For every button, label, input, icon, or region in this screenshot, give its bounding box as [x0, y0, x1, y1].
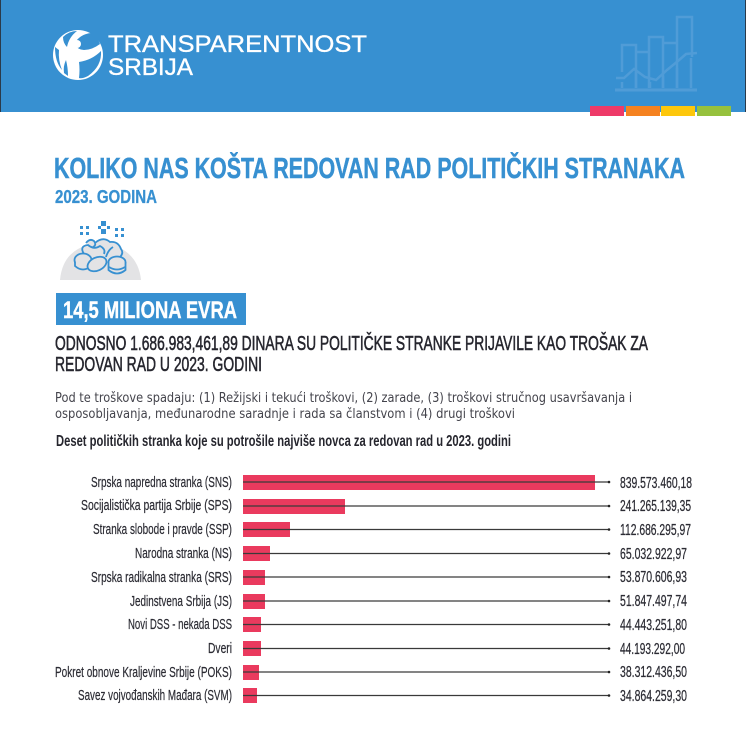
chart heading: Deset političkih stranka koje su potrošile najviše novca za redovan rad u 2023. godini	[56, 433, 511, 450]
row: POKS: 38.312.436,50	[620, 664, 687, 681]
logo: Transparentnost Srbija	[53, 30, 367, 81]
icon: pile of coins	[60, 221, 141, 280]
logo wordmark: TRANSPARENTNOST	[108, 31, 367, 58]
callout: 14,5 miliona evra: 14,5 MILIONA EVRA	[63, 297, 237, 324]
lead statement	[55, 332, 648, 376]
row: Novi DSS: Novi DSS - nekada DSS	[128, 616, 232, 633]
row: SNS: 839.573.460,18	[620, 475, 692, 492]
row: SRS: 53.870.606,93	[620, 569, 687, 586]
row: JS	[130, 593, 687, 610]
row: POKS: Pokret obnove Kraljevine Srbije (POKS)	[55, 664, 232, 681]
row: Novi DSS: 44.443.251,80	[620, 617, 687, 634]
row: POKS	[55, 664, 687, 681]
row: SPS	[81, 497, 691, 515]
row: SSP: 112.686.295,97	[620, 522, 691, 539]
callout: 14,5 miliona evra	[56, 293, 246, 325]
icon: globe with figure	[53, 30, 103, 80]
row: SPS: Socijalistička partija Srbije (SPS)	[81, 497, 232, 514]
row: SSP: Stranka slobode i pravde (SSP)	[93, 521, 232, 538]
row: SRS	[91, 569, 687, 586]
row: SVM: Savez vojvođanskih Mađara (SVM)	[78, 687, 232, 704]
lead statement: REDOVAN RAD U 2023. GODINI	[55, 354, 262, 376]
row: SNS: Srpska napredna stranka (SNS)	[91, 474, 232, 491]
colour strip	[590, 106, 731, 116]
row: NS: 65.032.922,97	[620, 546, 687, 563]
row: Dveri: Dveri	[208, 640, 232, 657]
bar chart: top ten parties	[55, 474, 692, 705]
row: Dveri: 44.193.292,00	[620, 641, 685, 658]
description text	[55, 391, 632, 422]
row: JS: 51.847.497,74	[620, 593, 687, 610]
row: SNS	[91, 474, 692, 492]
logo wordmark	[108, 31, 367, 81]
subtitle: 2023. GODINA	[55, 187, 157, 207]
row: SVM	[78, 687, 687, 705]
row: SPS: 241.265.139,35	[620, 498, 691, 515]
icon: faint bar and line chart	[615, 17, 697, 90]
row: Dveri	[208, 640, 685, 658]
description text: osposobljavanja, međunarodne saradnje i rada sa članstvom i (4) drugi troškovi	[55, 407, 515, 422]
row: NS: Narodna stranka (NS)	[135, 545, 232, 562]
row: SSP	[93, 521, 691, 539]
row: JS: Jedinstvena Srbija (JS)	[130, 593, 232, 610]
row: SVM: 34.864.259,30	[620, 688, 687, 705]
row: Novi DSS	[128, 616, 687, 634]
row: SRS: Srpska radikalna stranka (SRS)	[91, 569, 232, 586]
description text: Pod te troškove spadaju: (1) Režijski i tekući troškovi, (2) zarade, (3) troškovi stručnog usavršavanja i	[55, 391, 632, 406]
header band	[0, 0, 746, 112]
logo wordmark: SRBIJA	[108, 54, 193, 81]
row: NS	[135, 545, 687, 563]
